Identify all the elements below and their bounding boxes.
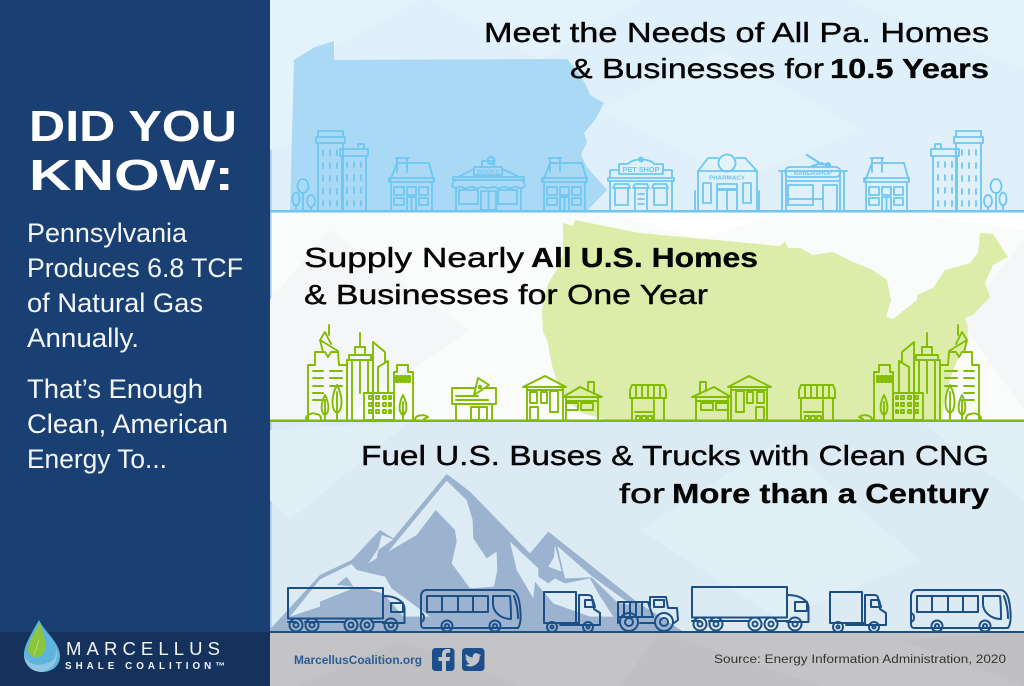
heading: all U.S. homes and businesses: & Businesses for One Year (304, 279, 708, 310)
icon: house two (542, 158, 587, 211)
logo wordmark (65, 638, 225, 672)
text: production statement: Produces 6.8 TCF (27, 253, 243, 283)
panel: sidebar (0, 0, 270, 632)
heading: Pennsylvania homes and businesses: Meet the Needs of All Pa. Homes (484, 17, 989, 48)
icon: dump truck (618, 597, 678, 631)
icon: shop left (630, 385, 666, 420)
heading: Pennsylvania homes and businesses (484, 17, 989, 84)
panel: U.S. map (542, 220, 1008, 420)
ground line: blue (270, 210, 1024, 212)
illustration: green town row (306, 325, 981, 420)
heading: buses and trucks: for (619, 478, 665, 509)
background bands (270, 0, 1024, 686)
text: production statement (27, 218, 243, 353)
icon: Twitter (462, 648, 484, 671)
icon: homes right (692, 376, 771, 420)
heading: buses and trucks (361, 440, 990, 509)
icon: pet shop: PET SHOP (622, 165, 660, 174)
icon: right city skyline (859, 325, 981, 420)
icon: bus right (911, 590, 1011, 632)
icon: box truck right (830, 592, 886, 632)
icon: left city skyline (306, 325, 428, 420)
text: production statement: Annually. (27, 323, 139, 353)
icon: water drop logo (24, 620, 60, 672)
icon: shop right (799, 385, 835, 420)
logo wordmark: SHALE COALITION™ (65, 661, 225, 672)
heading: Pennsylvania homes and businesses: 10.5 Years (830, 53, 989, 84)
panel: Pennsylvania state map (290, 41, 607, 211)
logo wordmark: MARCELLUS (66, 638, 220, 659)
icon: house three (864, 158, 909, 211)
heading: all U.S. homes and businesses: Supply Nearly (304, 242, 524, 273)
text: production statement: of Natural Gas (27, 288, 203, 318)
icon: pharmacy (695, 154, 759, 211)
heading: buses and trucks: Fuel U.S. Buses & Trucks with Clean CNG (361, 440, 989, 471)
icon: barbershop: BABERSHOP (794, 171, 832, 177)
icon: house one (389, 158, 434, 211)
text: production statement: Pennsylvania (27, 218, 187, 248)
icon: pizza shop (452, 378, 496, 420)
icon: pet shop (608, 158, 674, 211)
icon: bus left (421, 590, 521, 632)
ground line: navy (270, 631, 1024, 633)
icon: homes left (523, 376, 602, 420)
heading: Pennsylvania homes and businesses: & Businesses for (570, 53, 824, 84)
heading: buses and trucks: More than a Century (672, 478, 990, 509)
icon: bookstore (452, 157, 525, 211)
icon: semi truck right (692, 587, 808, 630)
heading: all U.S. homes and businesses: All U.S. Homes (531, 242, 758, 273)
icon: right towers (931, 131, 1006, 211)
heading: all U.S. homes and businesses (304, 242, 758, 310)
illustration: blue town row (292, 131, 1006, 211)
footer: website link: MarcellusCoalition.org (294, 655, 422, 667)
title: did you know (29, 102, 237, 200)
icon: barbershop (779, 155, 847, 211)
illustration: vehicle row (288, 587, 1011, 632)
ground line: green (270, 420, 1024, 422)
text: lead-in statement: That’s Enough (27, 374, 203, 404)
title: did you know: DID YOU (29, 102, 237, 151)
footer: source note: Source: Energy Information Administration, 2020 (714, 654, 1006, 666)
title: did you know: KNOW: (29, 151, 234, 200)
panel: logo strip (0, 620, 270, 686)
icon: box truck left (544, 592, 600, 632)
icon: bookstore: BOOKS (477, 170, 499, 176)
text: lead-in statement: Energy To... (27, 444, 167, 474)
snow on mountains (290, 481, 632, 617)
icon: left towers (292, 131, 368, 211)
text: lead-in statement (27, 374, 228, 474)
text: lead-in statement: Clean, American (27, 409, 228, 439)
icon: semi truck left (288, 588, 404, 632)
icon: Facebook (432, 648, 454, 671)
icon: pharmacy: PHARMACY (709, 176, 745, 182)
illustration: mountains (270, 474, 683, 632)
